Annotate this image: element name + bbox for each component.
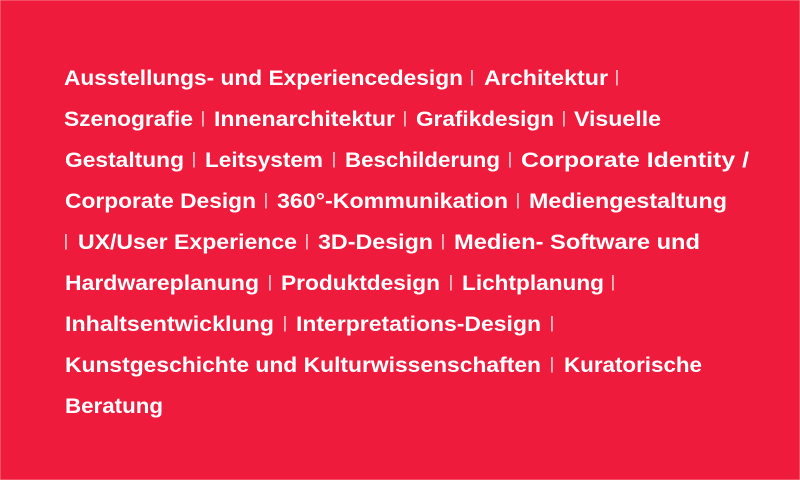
- text line 2: |: [403, 108, 407, 127]
- text line 3: Corporate Identity /: [521, 149, 749, 172]
- text line 5: Medien- Software und: [454, 231, 700, 254]
- text line 6: Produktdesign: [281, 272, 440, 295]
- text line 5: |: [64, 231, 68, 250]
- text line 3: Beschilderung: [345, 149, 500, 172]
- text line 1: Ausstellungs- und Experiencedesign: [64, 67, 463, 90]
- text line 1: |: [615, 67, 619, 86]
- text line 2: |: [201, 108, 205, 127]
- text line 1: Architektur: [484, 67, 608, 90]
- text line 1: |: [470, 67, 474, 86]
- text line 6: |: [268, 272, 272, 291]
- text line 2: Innenarchitektur: [214, 108, 395, 131]
- text line 6: Lichtplanung: [462, 272, 604, 295]
- text line 5: UX/User Experience: [78, 231, 297, 254]
- text line 8: Kunstgeschichte und Kulturwissenschaften: [65, 354, 541, 377]
- text line 4: [65, 190, 727, 213]
- text line 5: 3D-Design: [318, 231, 433, 254]
- text line 6: [65, 272, 615, 295]
- text line 8: [65, 354, 702, 377]
- text line 7: [65, 313, 554, 336]
- text line 4: Corporate Design: [65, 190, 256, 213]
- text line 7: |: [283, 313, 287, 332]
- text line 3: Leitsystem: [205, 149, 323, 172]
- text line 6: Hardwareplanung: [65, 272, 259, 295]
- text line 5: [64, 231, 700, 254]
- text line 5: |: [305, 231, 309, 250]
- text line 2: Szenografie: [64, 108, 193, 131]
- text line 6: |: [611, 272, 615, 291]
- text line 2: Visuelle: [574, 108, 661, 131]
- text line 5: |: [441, 231, 445, 250]
- text line 3: Gestaltung: [65, 149, 184, 172]
- text line 3: [65, 149, 749, 172]
- text line 7: Inhaltsentwicklung: [65, 313, 274, 336]
- text line 3: |: [192, 149, 196, 168]
- text line 1: [64, 67, 619, 90]
- text line 2: Grafikdesign: [416, 108, 554, 131]
- text line 3: |: [508, 149, 512, 168]
- text line 4: 360°-Kommunikation: [277, 190, 508, 213]
- text line 9: Beratung: [65, 395, 163, 418]
- text line 4: |: [264, 190, 268, 209]
- text line 8: |: [550, 354, 554, 373]
- text line 4: Mediengestaltung: [529, 190, 727, 213]
- text line 2: |: [562, 108, 566, 127]
- text line 6: |: [449, 272, 453, 291]
- text line 4: |: [516, 190, 520, 209]
- text line 2: [64, 108, 661, 131]
- text line 3: |: [332, 149, 336, 168]
- text line 8: Kuratorische: [564, 354, 702, 377]
- text line 7: Interpretations-Design: [296, 313, 541, 336]
- text line 7: |: [550, 313, 554, 332]
